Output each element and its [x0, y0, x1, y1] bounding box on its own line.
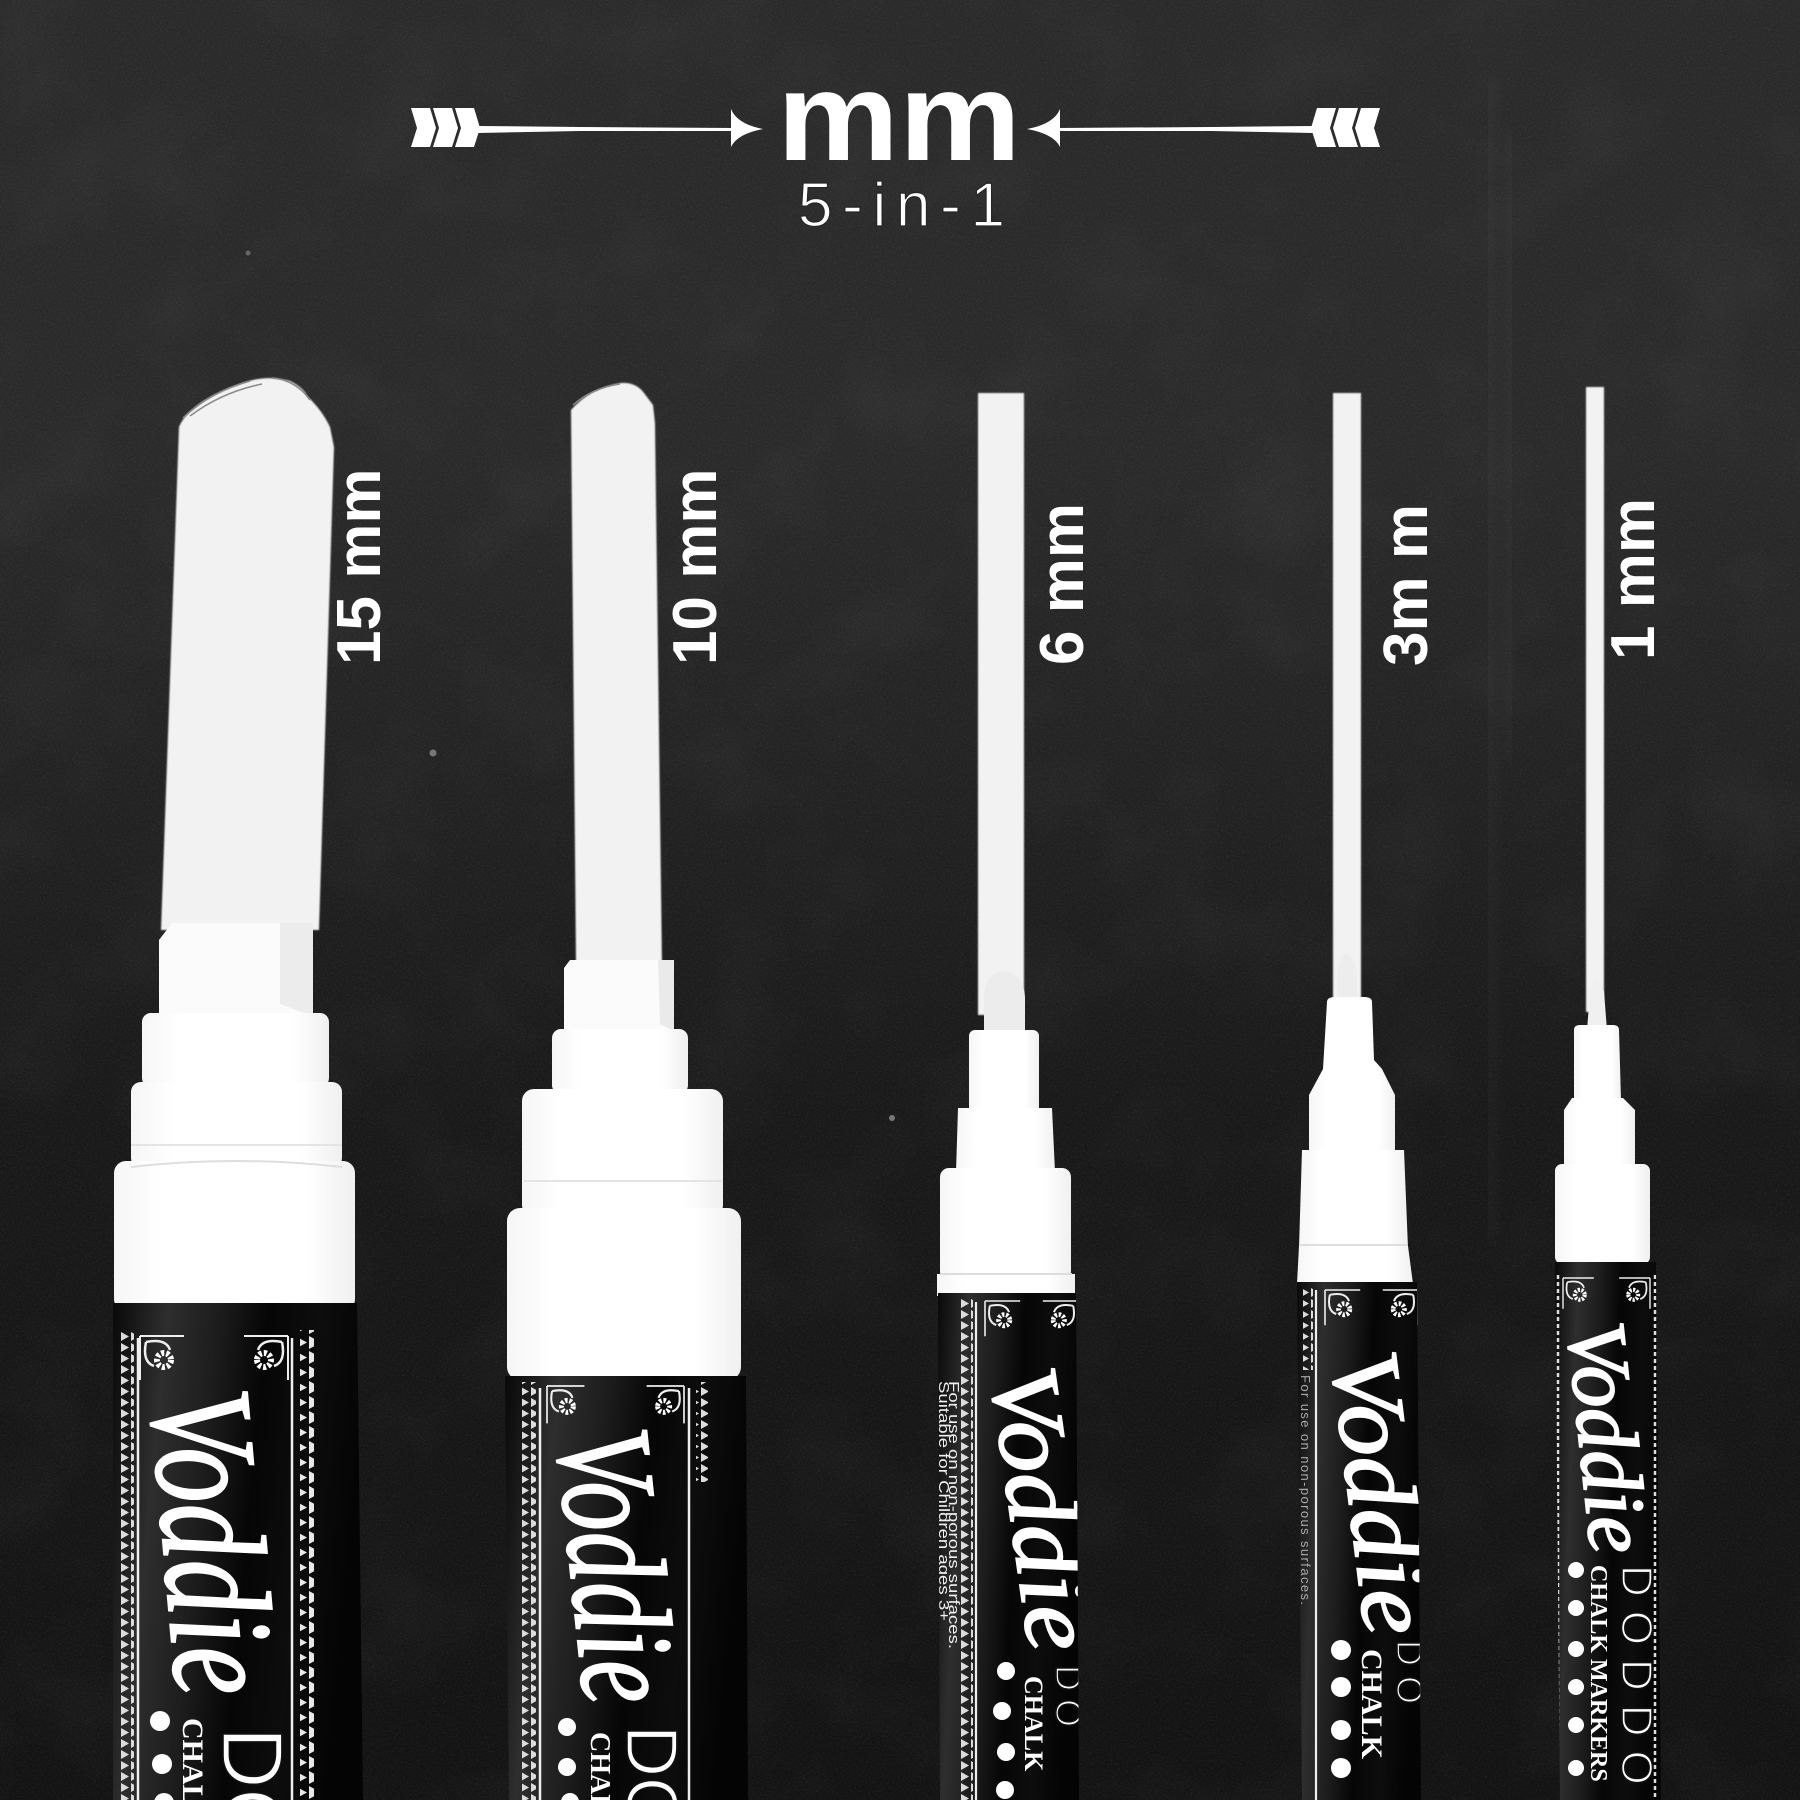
CHALK text: CHALK [1019, 1676, 1048, 1772]
marker: 3 mm [1295, 393, 1451, 1800]
cap collar [114, 1013, 355, 1311]
barrel with label [110, 1303, 366, 1800]
chisel nib [159, 923, 313, 1016]
arrow: right pointing to mm [1027, 108, 1380, 147]
chalk stroke: 1 mm [1586, 387, 1604, 1012]
dots [150, 1711, 174, 1800]
safety text: For use on non-porous surfaces. [945, 1381, 961, 1649]
cap collar [1555, 1025, 1650, 1264]
cap collar [937, 1030, 1075, 1296]
size label: 6 mm: 6 mm [1028, 503, 1097, 665]
size label: 15 mm: 15 mm [325, 469, 394, 665]
size label: 10 mm: 10 mm [661, 469, 730, 665]
size label: 3 mm: 3m m [1372, 504, 1441, 666]
DODO text: DODDO [1612, 1565, 1661, 1799]
barrel with label [935, 1293, 1115, 1800]
dots [1568, 1562, 1584, 1776]
marker: 6 mm [935, 393, 1115, 1800]
safety text: Suitable for Children ages 3+ [935, 1381, 951, 1621]
safety text [935, 1381, 961, 1649]
DODO text: DO [1048, 1665, 1089, 1735]
cap collar [1297, 997, 1413, 1284]
CHALK text: CHALK [1355, 1649, 1388, 1760]
CHALK MARKERS text: CHALK MARKERS [1585, 1565, 1611, 1782]
dots [993, 1662, 1015, 1799]
DODO text: DO [1389, 1640, 1430, 1714]
size label: 1 mm: 1 mm [1599, 498, 1668, 660]
title [777, 46, 1021, 240]
brand script: Voddie [968, 1360, 1115, 1657]
dots [558, 1718, 579, 1800]
dots [1331, 1640, 1351, 1778]
barrel with label [503, 1376, 751, 1800]
cap collar [507, 1029, 741, 1380]
arrow: left pointing to mm [411, 108, 763, 147]
fine nib [1587, 976, 1607, 1030]
brand script: Voddie [1309, 1345, 1451, 1641]
bullet nib [1337, 953, 1357, 1002]
chalk stroke: 10 mm [571, 383, 662, 965]
marker: 1 mm [1548, 387, 1668, 1800]
chalk stroke: 6 mm [978, 393, 1024, 1015]
barrel with label [1548, 1262, 1666, 1800]
safety text: For use on non-porous surfaces. [1298, 1375, 1313, 1605]
brand script: Voddie [526, 1421, 707, 1711]
chisel nib [564, 960, 674, 1031]
chalk stroke: 15 mm [161, 378, 334, 930]
marker: 15 mm [110, 378, 394, 1800]
heading: mm: mm [777, 46, 1021, 187]
brand script: Voddie [1548, 1317, 1666, 1558]
brand script: Voddie [117, 1383, 307, 1702]
subheading: 5-in-1: 5-in-1 [798, 171, 1005, 240]
chalk stroke: 3 mm [1333, 393, 1361, 1000]
bullet nib [984, 971, 1025, 1034]
marker: 10 mm [503, 383, 751, 1800]
barrel with label [1295, 1282, 1451, 1800]
